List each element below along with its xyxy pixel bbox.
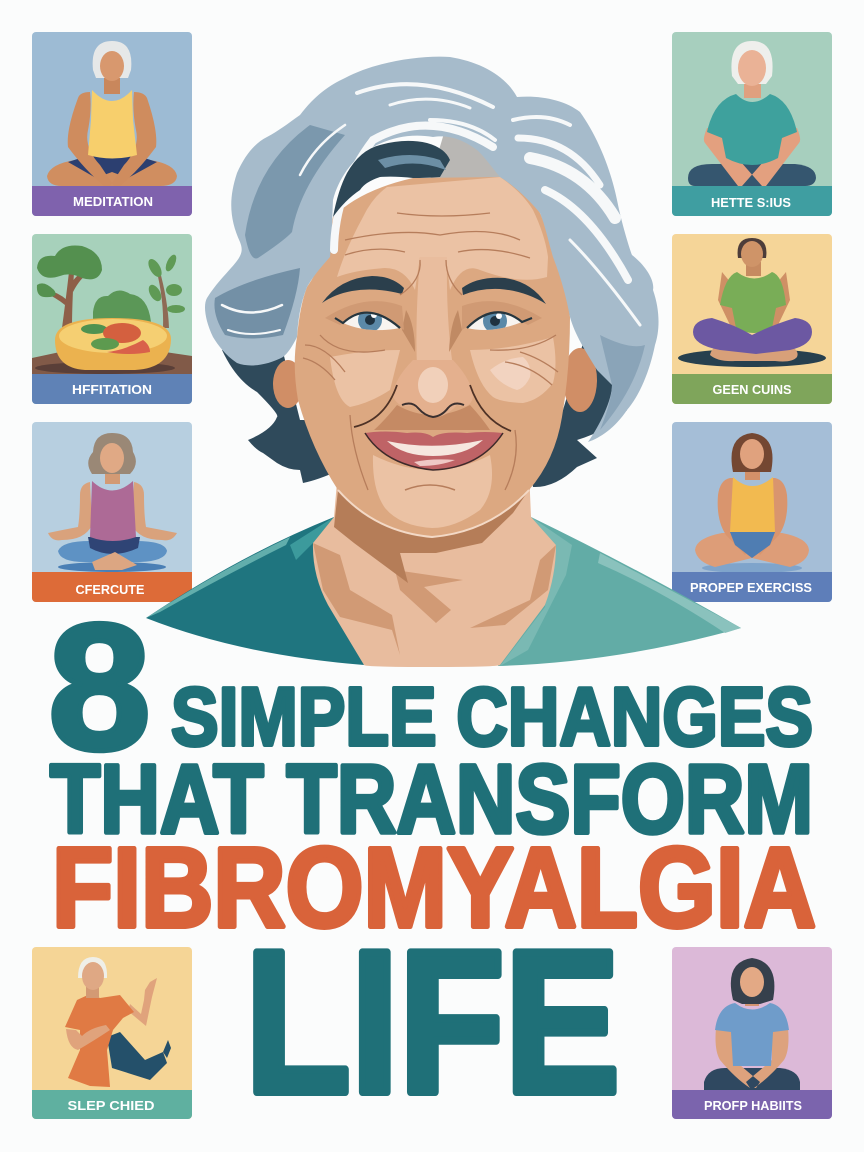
jaw rim [338,490,529,537]
figure: woman in blue shirt [704,958,800,1090]
forehead light plane [337,177,548,290]
wrinkles [303,213,558,490]
card: proper exercise [672,422,832,602]
eye socket shadows [402,310,462,352]
neck mid-tone folds [313,543,556,655]
ears [273,360,303,408]
shirt left shoulder [146,517,364,665]
label: MEDITATION [73,194,153,209]
line: life: LIFE [245,909,620,1136]
cheek left [330,350,400,407]
crown fill behind hairline [430,130,510,190]
hair: white highlights [222,84,640,334]
nose bridge [416,257,453,367]
chin light [373,455,492,528]
figure: man in orange shirt [65,957,171,1087]
title [48,587,816,1136]
label: PROFP HABIITS [704,1098,802,1113]
label: HFFITATION [72,382,152,397]
card: green [672,234,832,404]
card: proper habits [672,947,832,1119]
figure: woman in yellow tank [695,433,809,573]
figure: woman in green shirt [678,238,826,367]
card: health status [672,32,832,216]
card: meditation [32,32,192,216]
illustration: trees and dish [32,245,192,374]
cheek highlight [490,357,530,390]
figure: woman in pink tank [48,433,177,572]
label: GEEN CUINS [712,382,792,397]
label: PROPEP EXERCISS [690,580,812,595]
mouth [365,432,503,470]
shirt right shoulder [498,517,741,666]
cheek right [470,337,556,403]
neck shadow under chin [334,490,529,583]
label: HETTE S:IUS [711,195,791,210]
face base [295,177,570,537]
eye left [334,312,401,330]
label: SLEP CHIED [68,1098,154,1113]
hair: grey main mass [205,57,659,442]
chin crease [405,485,455,490]
mouth-area shadow [374,405,490,430]
figure: woman in teal shirt [688,41,816,186]
card: exercise left [32,422,192,602]
smile lines [354,385,511,431]
hair: dark front strands [333,141,450,217]
card: healthy food [32,234,192,404]
label: CFERCUTE [76,582,145,597]
eyelid tone [325,301,542,330]
figure: woman in yellow tank [47,41,177,186]
dark back hair [222,320,640,487]
neck [313,470,556,667]
numeral 8: 8 [48,587,151,788]
eyebrows [322,276,404,303]
portrait: smiling older woman [146,57,741,667]
hair: shadow strands [245,125,345,259]
eye right [466,311,532,330]
card: sleep [32,947,192,1119]
nose [393,360,473,417]
